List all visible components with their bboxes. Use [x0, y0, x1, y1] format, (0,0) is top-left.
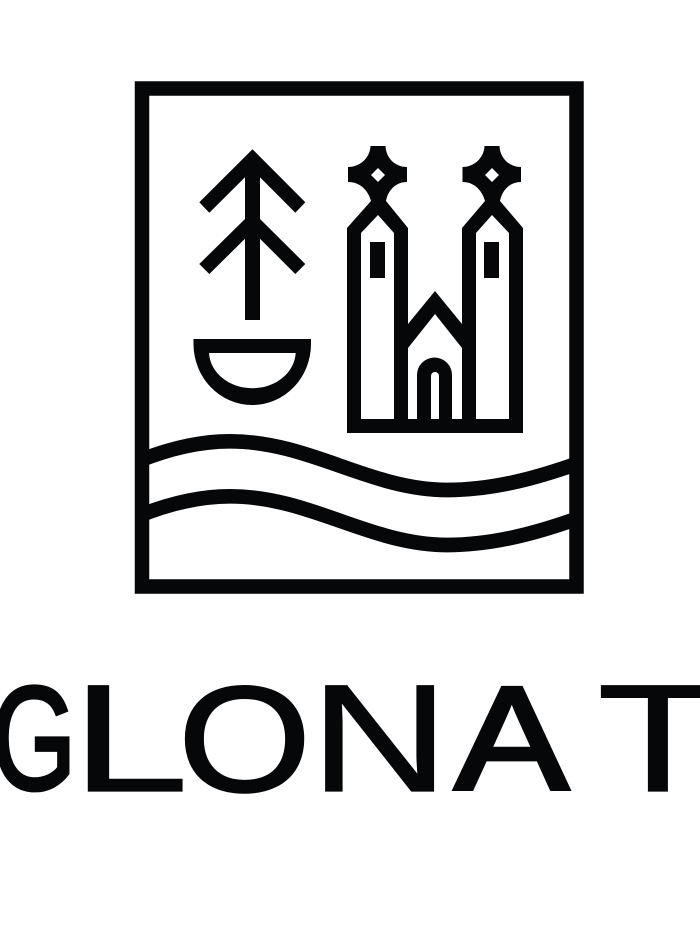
wordmark: L [71, 653, 189, 824]
right tower and cross [462, 146, 523, 433]
central gable [408, 291, 462, 433]
icon: lower wave [136, 496, 583, 545]
icon: twin-towered church [347, 146, 523, 433]
arched door [417, 358, 452, 433]
icon: bowl [194, 339, 311, 405]
wordmark: A [455, 657, 568, 821]
tower windows [370, 242, 499, 278]
logo emblem [134, 81, 584, 594]
icon: upper wave [136, 441, 583, 490]
wordmark: N [310, 653, 449, 824]
church base [347, 419, 523, 433]
emblem frame [142, 88, 576, 586]
icon: pine tree [199, 149, 305, 320]
wordmark: O [178, 655, 311, 823]
left tower and cross [347, 146, 408, 433]
